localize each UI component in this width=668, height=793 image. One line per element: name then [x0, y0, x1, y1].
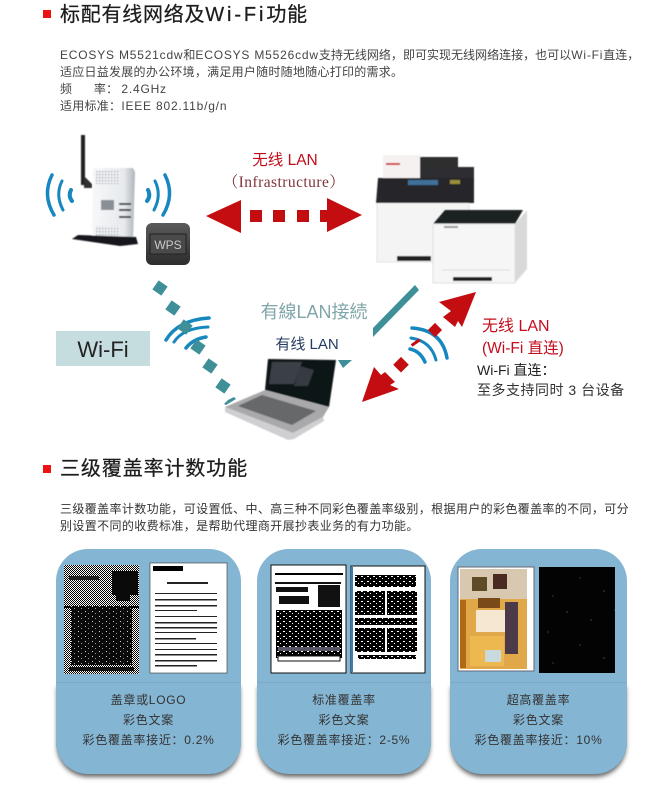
label: wireless LAN Wi-Fi direct: 无线 LAN [482, 317, 550, 335]
caption: super-high coverage [474, 693, 602, 747]
panel: standard coverage [257, 549, 431, 774]
caption: standard coverage: 彩色文案 [319, 713, 369, 727]
icon: wifi waves on teal link [166, 318, 209, 348]
arrow: router to printers [206, 198, 362, 233]
caption: standard coverage: 彩色覆盖率接近：2-5% [278, 733, 410, 747]
text block: wireless description [60, 48, 639, 113]
text: Wi-Fi direct device limit: Wi-Fi 直连： [477, 362, 556, 378]
sample images: super-high coverage [458, 566, 615, 673]
caption: standard coverage [278, 693, 410, 747]
label: wired LAN (Japanese): 有線LAN接続 [260, 302, 368, 322]
text: Wi-Fi direct device limit [477, 362, 625, 398]
sample images: standard coverage [270, 564, 426, 674]
caption: logo coverage: 盖章或LOGO [111, 693, 186, 707]
text block: wireless description: 频 率：2.4GHz [60, 82, 167, 96]
sample images: logo coverage [64, 562, 228, 674]
label: wireless LAN Wi-Fi direct: (Wi-Fi 直连) [482, 339, 564, 357]
icon: wifi waves on red link [410, 328, 447, 362]
panel: super-high coverage [450, 549, 627, 774]
icon: left wifi waves [47, 175, 72, 215]
label: Wi-Fi box [56, 331, 150, 366]
text block: wireless description: 适应日益发展的办公环境，满足用户随时随地随心打印的需求。 [60, 65, 403, 79]
label: wired LAN: 有线 LAN [275, 336, 339, 353]
caption: super-high coverage: 彩色覆盖率接近：10% [475, 733, 602, 747]
label: wireless LAN infrastructure: （Infrastructure） [223, 174, 345, 191]
heading: coverage section: 三级覆盖率计数功能 [60, 458, 248, 480]
connection: teal dotted link from router to laptop [152, 280, 236, 405]
text block: coverage description: 别设置不同的收费标准，是帮助代理商开展抄表业务的有力功能。 [60, 519, 419, 533]
icon: WPS button: WPS [154, 238, 182, 252]
label: wireless LAN infrastructure: 无线 LAN [252, 151, 318, 169]
label: Wi-Fi box: Wi-Fi [77, 337, 129, 362]
caption: logo coverage: 彩色文案 [123, 713, 174, 727]
label: wireless LAN Wi-Fi direct [482, 317, 564, 357]
text block: wireless description: 适用标准：IEEE 802.11b/g/n [60, 99, 227, 113]
caption: logo coverage: 彩色覆盖率接近：0.2% [82, 733, 214, 747]
icon: desktop printer [433, 210, 527, 283]
network diagram [46, 134, 625, 440]
icon: laptop [225, 359, 336, 440]
heading: wireless section: 标配有线网络及Wi-Fi功能 [60, 4, 308, 26]
label: wireless LAN infrastructure [223, 151, 345, 191]
icon: multifunction printer [376, 155, 474, 262]
text block: coverage description: 三级覆盖率计数功能，可设置低、中、高三种不同彩色覆盖率级别，根据用户的彩色覆盖率的不同，可分 [60, 502, 629, 516]
panel: logo coverage [56, 549, 241, 774]
caption: logo coverage [82, 693, 214, 747]
caption: super-high coverage: 超高覆盖率 [507, 693, 570, 707]
icon: WPS button [146, 223, 190, 265]
icon: wireless router [72, 135, 138, 246]
caption: standard coverage: 标准覆盖率 [312, 693, 376, 707]
text block: coverage description [60, 502, 629, 533]
bottom band: standard coverage [257, 682, 431, 774]
heading marker: wireless section [43, 10, 51, 18]
bottom band: super-high coverage [450, 682, 627, 774]
text: Wi-Fi direct device limit: 至多支持同时 3 台设备 [477, 382, 625, 398]
bottom band: logo coverage [56, 682, 241, 774]
caption: super-high coverage: 彩色文案 [513, 713, 564, 727]
text block: wireless description: ECOSYS M5521cdw和ECOSYS M5526cdw支持无线网络，即可实现无线网络连接，也可以Wi-Fi直连， [60, 48, 639, 62]
wired connection line [338, 285, 419, 368]
arrow: printer to laptop wireless direct [362, 292, 476, 402]
icon: right wifi waves [147, 175, 170, 215]
heading marker: coverage section [43, 465, 51, 473]
